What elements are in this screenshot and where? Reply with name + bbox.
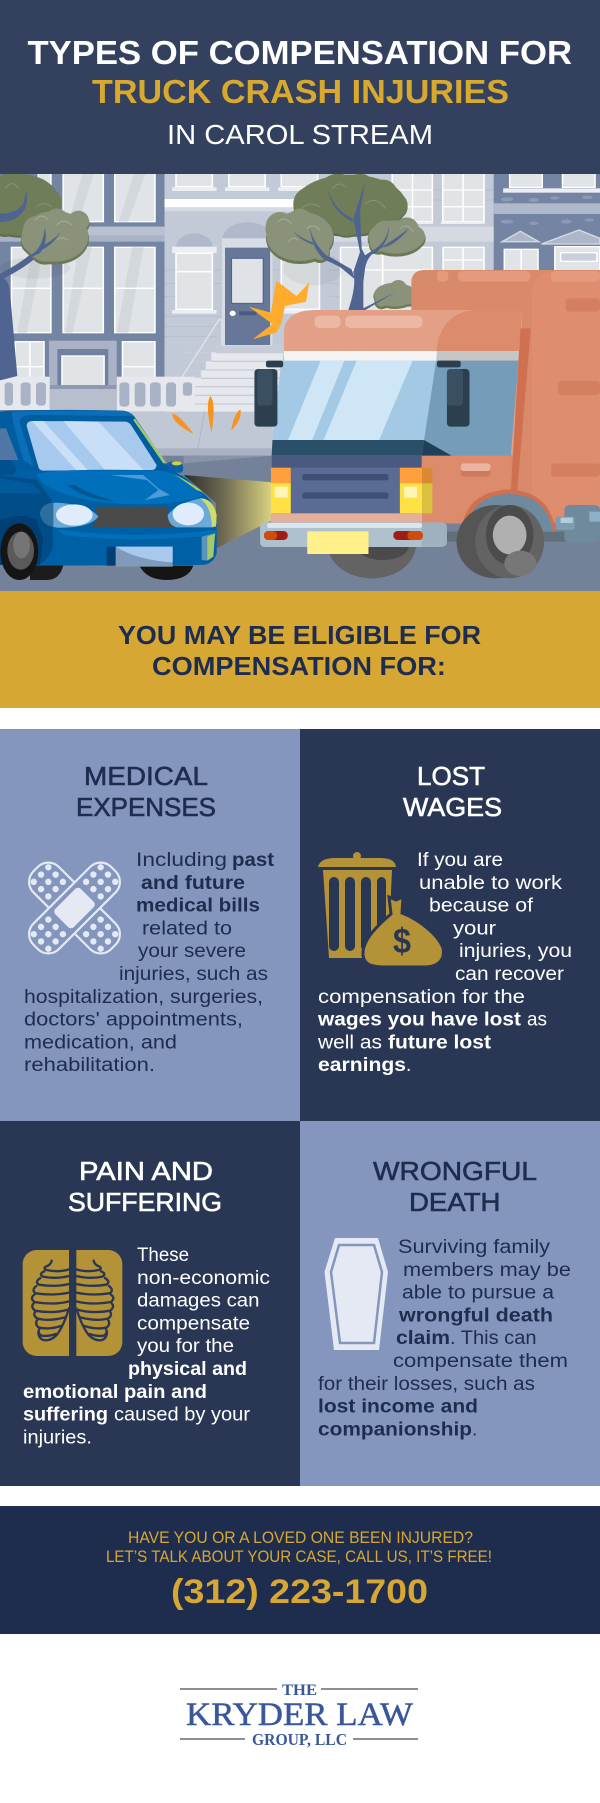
front wheel [330,547,416,578]
heading: pain and suffering [68,1156,222,1217]
car windshield [27,421,157,471]
text: lost wages: well as [317,1032,382,1053]
text: lost wages: future lost [388,1032,492,1053]
rear wheel and fender [457,489,556,578]
text: pain and suffering: injuries. [23,1427,92,1448]
car mirror [167,461,183,473]
heading: medical expenses: EXPENSES [76,792,216,822]
text: pain and suffering: non-economic [137,1268,270,1289]
heading: lost wages: LOST [417,761,485,791]
call to action text: LET’S TALK ABOUT YOUR CASE, CALL US, IT’S FREE! [106,1548,492,1566]
text: wrongful death: Surviving family [398,1237,551,1258]
panel: pain and suffering [0,1121,300,1486]
text: lost wages: wages you have lost [317,1010,522,1031]
heading: wrongful death: DEATH [409,1187,500,1217]
title line 3: IN CAROL STREAM [167,119,433,150]
text: wrongful death: able to pursue a [402,1283,554,1304]
car headlights [40,498,217,528]
text: lost wages: injuries, you [459,941,572,962]
text: lost wages: your [453,918,497,939]
title line 2: TRUCK CRASH INJURIES [92,73,509,110]
text: medical expenses: medication, and [24,1032,177,1053]
title line 1: TYPES OF COMPENSATION FOR [28,34,572,71]
car [0,410,217,580]
call to action text [106,1529,492,1566]
text: pain and suffering: suffering [23,1405,108,1426]
text: lost wages: . [406,1055,411,1076]
logo: The Kryder Law Group: GROUP, LLC [252,1730,347,1749]
text: lost wages: unable to work [419,873,563,894]
icon: rib cage [23,1250,122,1356]
text: pain and suffering: emotional pain and [23,1382,207,1403]
text: medical expenses: past [232,850,275,871]
text: pain and suffering: compensate [137,1313,250,1334]
text: medical expenses: doctors' appointments, [24,1010,243,1031]
call to action panel [0,1506,600,1634]
icon: coffin [324,1238,388,1350]
bumper [260,522,447,554]
text: wrongful death: for their losses, such as [318,1374,535,1395]
panel: lost wages [300,729,600,1121]
text: pain and suffering: damages can [137,1291,260,1312]
panel: wrongful death [300,1121,600,1486]
text: wrongful death: companionship [318,1419,472,1440]
text: wrongful death: compensate them [393,1351,568,1372]
text: medical expenses: rehabilitation. [24,1055,155,1076]
text: medical expenses: hospitalization, surgeries, [24,987,263,1008]
stairs [182,318,284,412]
truck cab [272,310,531,523]
tree left [0,171,90,380]
illustration: truck and car crash on a city street [0,171,600,592]
heading: pain and suffering: PAIN AND [79,1156,213,1186]
heading: lost wages [403,761,502,822]
phone number: (312) 223-1700 [171,1573,428,1611]
heading: lost wages: WAGES [403,792,502,822]
heading: medical expenses: MEDICAL [84,761,208,791]
truck mirrors [254,361,470,427]
text: lost wages: If you are [417,850,503,871]
heading: wrongful death: WRONGFUL [373,1156,537,1186]
icon: crossed bandages [23,856,126,960]
heading: pain and suffering: SUFFERING [68,1187,222,1217]
buildings [0,173,600,417]
text: medical expenses: and future [141,873,245,894]
logo: The Kryder Law Group: KRYDER LAW [186,1697,414,1733]
windshield [272,361,436,441]
text: wrongful death: members may be [403,1260,571,1281]
icon: trash can with money bag [318,852,443,967]
small houses in the distance [502,230,600,244]
sidewalk and road [0,412,600,592]
text: lost wages: as [527,1010,547,1031]
text: wrongful death [318,1237,571,1440]
heading: medical expenses [76,761,216,822]
text: lost wages [317,850,572,1076]
text: pain and suffering: you for the [137,1336,234,1357]
car grille [92,507,177,527]
headlight beam [184,475,272,549]
text: medical expenses: your severe [138,941,246,962]
text: wrongful death: . [472,1419,477,1440]
banner text: YOU MAY BE ELIGIBLE FOR [118,620,481,650]
text: wrongful death: lost income and [318,1397,478,1418]
banner text [118,620,481,681]
text: pain and suffering: physical and [128,1359,247,1380]
text: wrongful death: . This can [450,1328,536,1349]
text: pain and suffering: These [137,1245,189,1266]
front door [222,238,272,346]
banner text: COMPENSATION FOR: [152,651,446,681]
panel: medical expenses [0,729,300,1121]
car left wheel [0,523,38,580]
text: medical expenses: related to [142,918,232,939]
license plate [307,531,368,554]
heading: wrongful death [373,1156,537,1217]
text: medical expenses: Including [136,850,227,871]
call to action text: HAVE YOU OR A LOVED ONE BEEN INJURED? [128,1529,473,1547]
text: lost wages: compensation for the [318,987,525,1008]
text: lost wages: earnings [318,1055,406,1076]
logo: The Kryder Law Group: THE [282,1682,317,1699]
tree right [266,174,426,310]
icon: trash can with money bag: $ [393,922,411,961]
text: lost wages: can recover [455,964,565,985]
impact spark [172,281,309,434]
truck rear chassis [447,505,600,542]
text: pain and suffering [23,1245,270,1448]
gold banner [0,591,600,708]
text: medical expenses: medical bills [136,896,260,917]
balustrades [0,377,195,412]
text: medical expenses: injuries, such as [119,964,268,985]
logo: The Kryder Law Group [180,1682,418,1749]
text: medical expenses [24,850,275,1076]
truck [254,270,600,578]
text: pain and suffering: caused by your [114,1405,251,1426]
car license plate [107,547,173,567]
text: wrongful death: wrongful death [398,1305,553,1326]
text: wrongful death: claim [396,1328,450,1349]
truck headlights [271,468,432,513]
header panel [0,0,600,174]
text: lost wages: because of [429,896,534,917]
